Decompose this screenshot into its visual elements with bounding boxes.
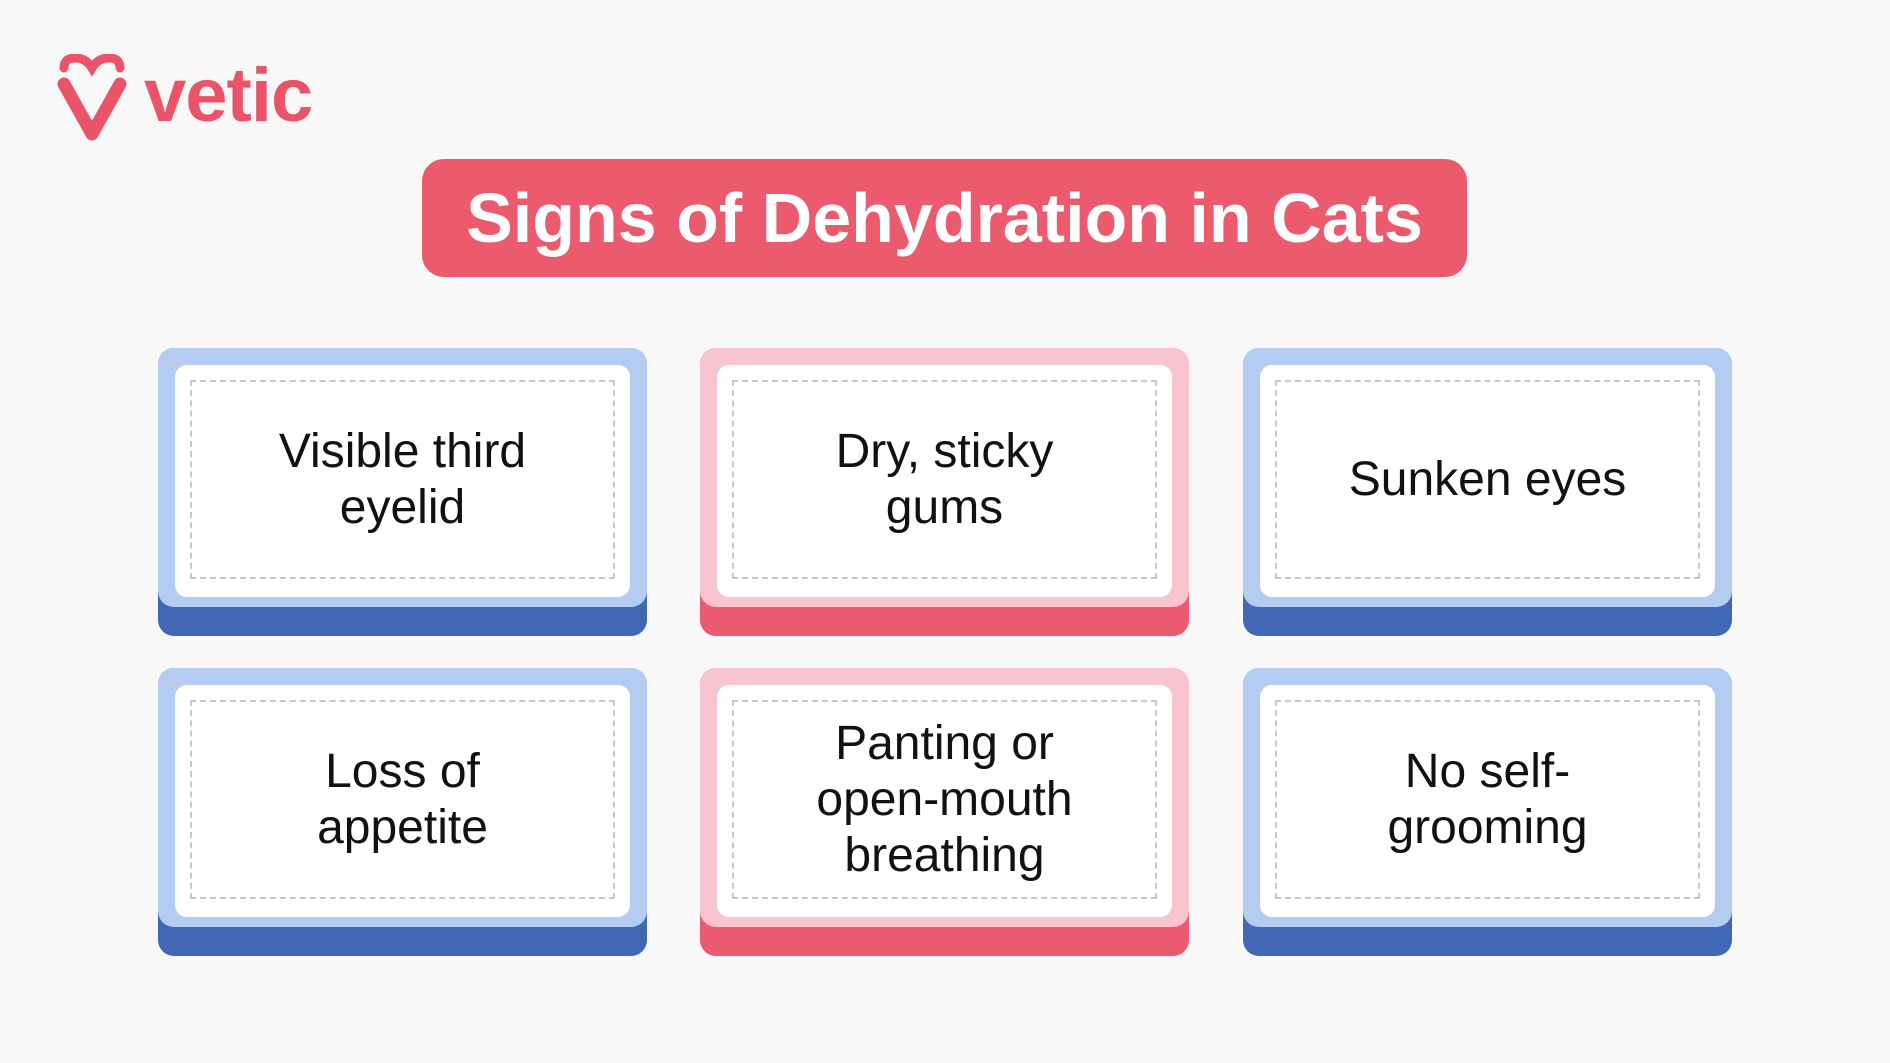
card: sunken eyes <box>1243 348 1732 636</box>
card: no self-grooming: No self- <box>1405 744 1570 798</box>
card: dry sticky gums: gums <box>886 480 1003 534</box>
card: dry sticky gums <box>700 348 1189 636</box>
title: Signs of Dehydration in Cats <box>466 179 1423 257</box>
card: no self-grooming <box>1243 668 1732 956</box>
logo text: vetic <box>144 53 312 138</box>
card: loss of appetite: appetite <box>317 800 488 854</box>
card: panting: breathing <box>844 828 1045 882</box>
card: dry sticky gums: Dry, sticky <box>836 424 1053 478</box>
card: visible third eyelid: Visible third <box>279 424 526 478</box>
card: panting <box>700 668 1189 956</box>
card: panting: Panting or <box>835 716 1054 770</box>
card: panting: open-mouth <box>816 772 1073 826</box>
card: loss of appetite: Loss of <box>325 744 480 798</box>
card: no self-grooming: grooming <box>1387 800 1588 854</box>
card: sunken eyes: Sunken eyes <box>1349 452 1626 506</box>
logo <box>58 53 312 140</box>
title <box>422 159 1467 277</box>
icon: heart v <box>58 54 126 140</box>
card: visible third eyelid: eyelid <box>340 480 465 534</box>
card: visible third eyelid <box>158 348 647 636</box>
card: loss of appetite <box>158 668 647 956</box>
